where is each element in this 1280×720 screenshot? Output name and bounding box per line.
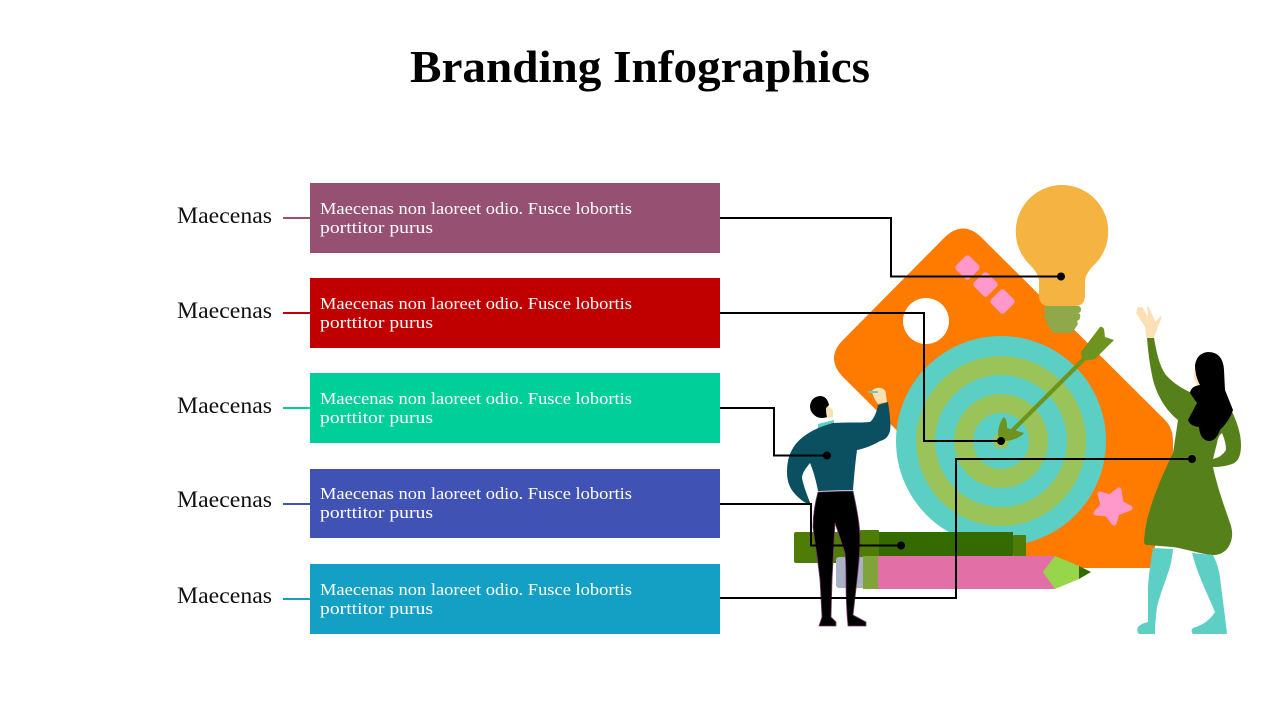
row 3 panel xyxy=(310,373,720,443)
row 4 tick xyxy=(283,503,310,505)
woman figure xyxy=(1137,307,1241,634)
row 4 panel xyxy=(310,469,720,538)
icon: arrow xyxy=(998,327,1114,441)
row 3 xyxy=(177,373,720,443)
title: Branding Infographics xyxy=(410,41,870,92)
man figure xyxy=(787,388,890,626)
connector 5 xyxy=(720,459,1192,598)
row 2 text: porttitor purus xyxy=(320,313,433,332)
row 4 xyxy=(177,469,720,538)
row 5 label: Maecenas xyxy=(177,583,272,608)
row 5 xyxy=(177,564,720,634)
row 1 label: Maecenas xyxy=(177,203,272,228)
row 3 text: porttitor purus xyxy=(320,408,433,427)
row 2 xyxy=(177,278,720,348)
row 4 label: Maecenas xyxy=(177,487,272,512)
icon: star xyxy=(1096,490,1130,523)
row 2 text: Maecenas non laoreet odio. Fusce lobortis xyxy=(320,294,632,313)
row 1 tick xyxy=(283,217,310,219)
row 2 panel xyxy=(310,278,720,348)
row 4 text: porttitor purus xyxy=(320,503,433,522)
row 1 panel xyxy=(310,183,720,253)
connector 2 xyxy=(720,313,1001,441)
row 3 label: Maecenas xyxy=(177,393,272,418)
illustration xyxy=(787,185,1241,634)
orange tag shape xyxy=(834,228,1173,568)
connector 1 xyxy=(720,218,1061,276)
row 1 text: Maecenas non laoreet odio. Fusce lobortis xyxy=(320,199,632,218)
row 4 text: Maecenas non laoreet odio. Fusce lobortis xyxy=(320,484,632,503)
row 5 text: porttitor purus xyxy=(320,599,433,618)
row 3 text: Maecenas non laoreet odio. Fusce lobortis xyxy=(320,389,632,408)
row 5 panel xyxy=(310,564,720,634)
row 5 text: Maecenas non laoreet odio. Fusce lobortis xyxy=(320,580,632,599)
row 1 xyxy=(177,183,720,253)
icon: pencil xyxy=(836,556,1091,589)
row 3 tick xyxy=(283,407,310,409)
icon: target xyxy=(896,336,1106,546)
row 5 tick xyxy=(283,598,310,600)
row 2 tick xyxy=(283,312,310,314)
connector dots xyxy=(823,272,1196,550)
connector lines xyxy=(720,218,1192,598)
connector 4 xyxy=(720,504,901,546)
icon: books xyxy=(794,530,1026,563)
row 1 text: porttitor purus xyxy=(320,218,433,237)
icon: light bulb xyxy=(1016,185,1108,333)
connector 3 xyxy=(720,408,827,456)
row 2 label: Maecenas xyxy=(177,298,272,323)
